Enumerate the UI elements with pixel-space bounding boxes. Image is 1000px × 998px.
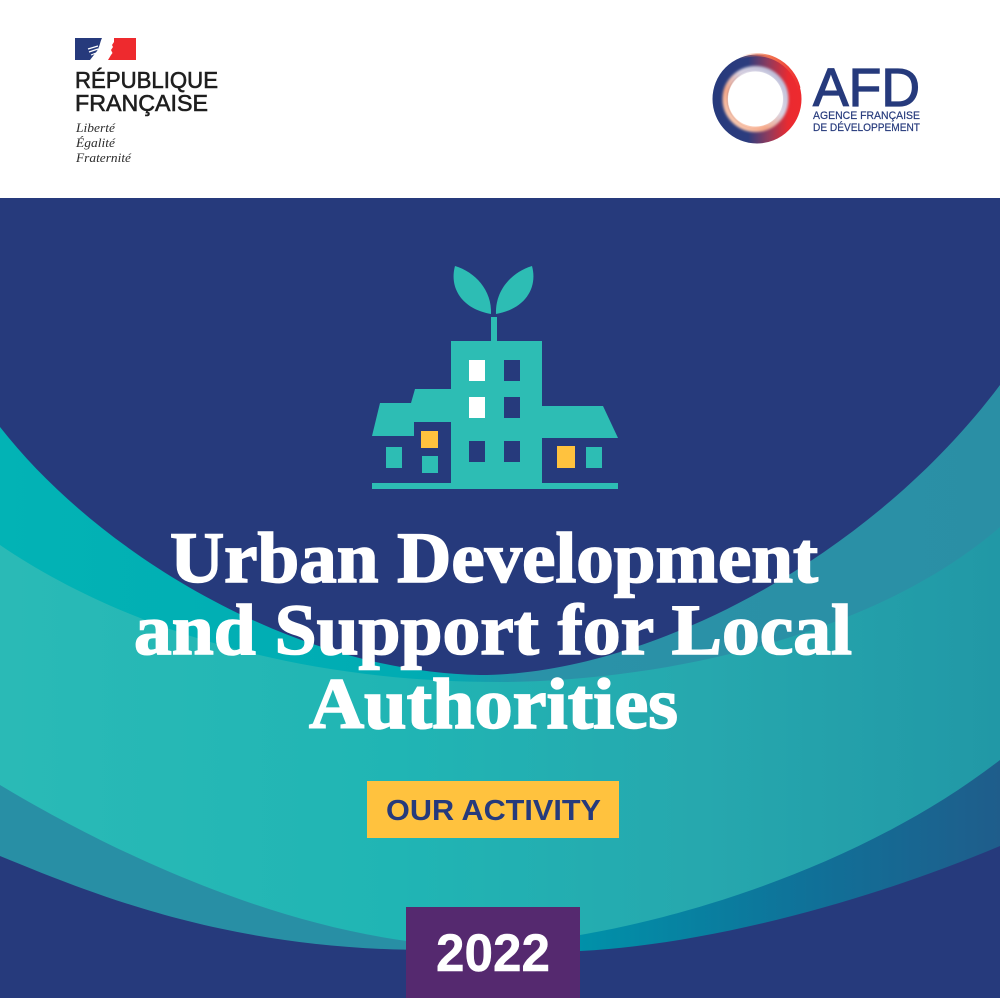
right leaf — [496, 266, 533, 314]
title line 3: Authorities — [309, 664, 678, 744]
wordmark: de Développement: DE DÉVELOPPEMENT — [813, 121, 920, 134]
badge: our activity — [367, 781, 619, 838]
title line 2: and Support for Local — [134, 590, 852, 670]
badge: year 2022 — [406, 907, 580, 998]
icon: AFD ring — [720, 55, 799, 136]
title line 1: Urban Development — [170, 518, 818, 598]
title — [134, 518, 852, 744]
left roofs — [372, 389, 452, 436]
right roof — [541, 406, 618, 438]
icon: city buildings with sprout — [372, 266, 618, 489]
wordmark: AFD: AFD — [813, 58, 920, 118]
left house windows — [386, 431, 438, 473]
central light teal wave — [0, 527, 1000, 947]
icon: French flag — [75, 38, 136, 60]
motto: Liberté: Liberté — [75, 120, 116, 135]
badge: year 2022: 2022 — [436, 924, 550, 983]
motto: Égalité: Égalité — [75, 135, 116, 150]
stem — [491, 317, 497, 342]
motto: Fraternité: Fraternité — [75, 150, 132, 165]
central tower — [451, 341, 542, 489]
wordmark: République: RÉPUBLIQUE — [75, 67, 218, 93]
right house windows — [557, 446, 602, 468]
logo: AFD — [720, 55, 920, 136]
logo: République Française — [75, 38, 218, 165]
tower windows — [469, 360, 520, 462]
left leaf — [454, 266, 491, 314]
wordmark: Agence Française: AGENCE FRANÇAISE — [813, 110, 920, 122]
lower teal wave — [0, 700, 1000, 951]
wordmark: Française: FRANÇAISE — [75, 90, 208, 116]
upper teal wave — [0, 385, 1000, 800]
ground line — [372, 483, 618, 489]
header band — [0, 0, 1000, 198]
badge: our activity: OUR ACTIVITY — [386, 795, 601, 827]
